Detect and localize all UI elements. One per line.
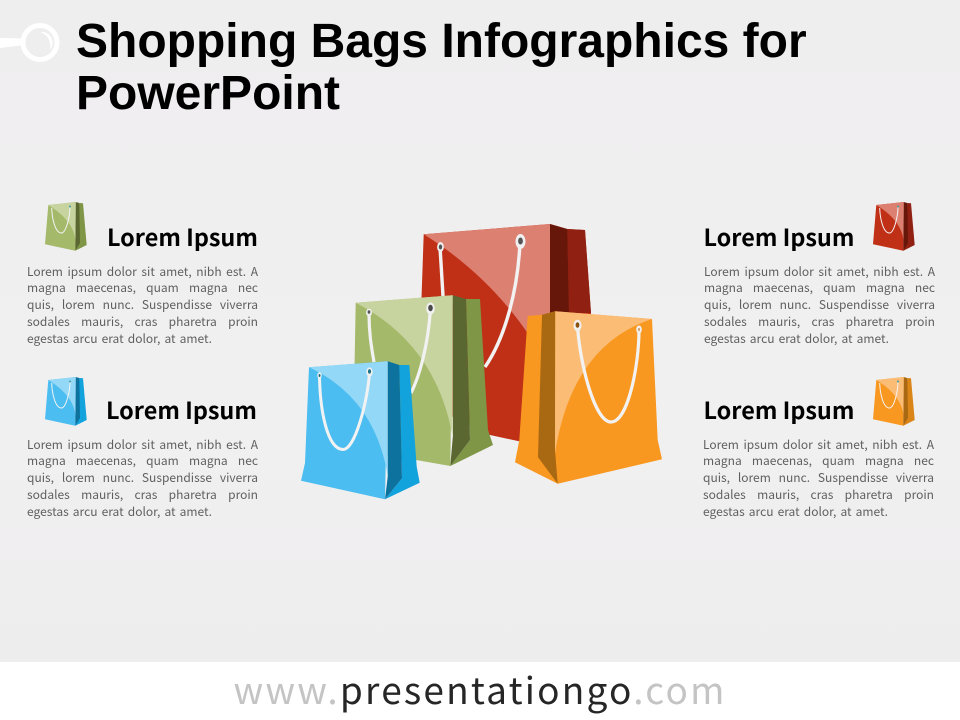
text: top left: sodales mauris, cras pharetra proin bbox=[27, 313, 258, 330]
heading: bottom right: Lorem Ipsum bbox=[704, 392, 854, 426]
text: bottom right: sodales mauris, cras pharetra proin bbox=[703, 486, 934, 503]
text: top right: Lorem ipsum dolor sit amet, nibh est. A bbox=[704, 262, 935, 280]
text: top left: magna maecenas, quam magna nec bbox=[27, 279, 258, 296]
text: top right: egestas arcu erat dolor, at amet. bbox=[704, 330, 889, 347]
title: Shopping Bags Infographics for PowerPoint bbox=[76, 15, 807, 120]
text: top left: quis, lorem nunc. Suspendisse viverra bbox=[27, 296, 258, 313]
text: top left: egestas arcu erat dolor, at amet. bbox=[27, 330, 212, 347]
text: bottom right: quis, lorem nunc. Suspendisse viverra bbox=[703, 469, 934, 486]
green bag bbox=[353, 295, 493, 466]
text: bottom left: magna maecenas, quam magna nec bbox=[27, 452, 258, 469]
text: bottom right: magna maecenas, quam magna nec bbox=[703, 452, 934, 469]
blue bag bbox=[301, 361, 420, 499]
icon: red bag bbox=[873, 202, 915, 251]
footer: website: www.presentationgo.com bbox=[233, 661, 727, 715]
text: bottom left: sodales mauris, cras pharetra proin bbox=[27, 486, 258, 503]
heading: top right: Lorem Ipsum bbox=[704, 219, 854, 253]
text: top right bbox=[704, 262, 935, 347]
text: bottom left: Lorem ipsum dolor sit amet, nibh est. A bbox=[27, 436, 258, 452]
text: bottom right: Lorem ipsum dolor sit amet, nibh est. A bbox=[703, 436, 934, 452]
text: top right: magna maecenas, quam magna nec bbox=[704, 279, 935, 296]
footer: website bbox=[0, 658, 960, 720]
heading: top left: Lorem Ipsum bbox=[107, 219, 258, 253]
text: top right: quis, lorem nunc. Suspendisse viverra bbox=[704, 296, 935, 313]
icon: blue bag bbox=[45, 377, 87, 426]
heading: bottom left: Lorem Ipsum bbox=[106, 392, 257, 426]
icon: green bag bbox=[45, 202, 87, 251]
orange bag bbox=[515, 311, 662, 484]
red bag bbox=[418, 224, 591, 445]
text: top left bbox=[27, 262, 258, 347]
text: bottom left: egestas arcu erat dolor, at amet. bbox=[27, 503, 212, 520]
icon: title ring pin bbox=[0, 23, 60, 62]
text: bottom right: egestas arcu erat dolor, at amet. bbox=[703, 503, 888, 520]
text: bottom left bbox=[27, 436, 258, 520]
text: bottom left: quis, lorem nunc. Suspendisse viverra bbox=[27, 469, 258, 486]
icon: orange bag bbox=[873, 377, 915, 426]
text: top left: Lorem ipsum dolor sit amet, nibh est. A bbox=[27, 262, 258, 280]
text: bottom right bbox=[703, 436, 934, 520]
text: top right: sodales mauris, cras pharetra proin bbox=[704, 313, 935, 330]
